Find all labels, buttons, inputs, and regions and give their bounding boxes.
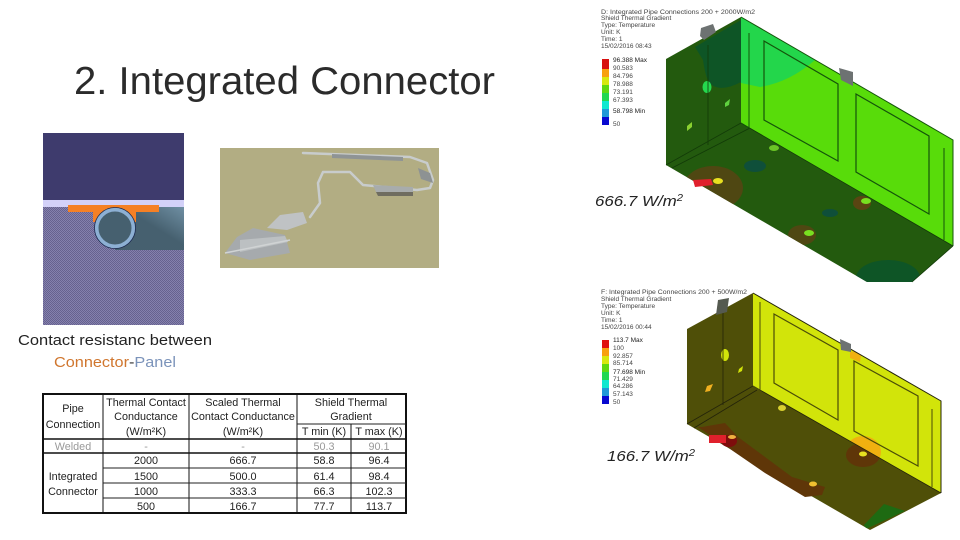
table: thermal results: 50.3	[313, 441, 335, 453]
legend: 166.7 simulation: 57.143	[613, 391, 633, 398]
table: thermal results: Shield Thermal	[315, 397, 387, 409]
table: thermal results: 333.3	[229, 486, 257, 498]
table: thermal results: Pipe	[62, 403, 84, 415]
table: thermal results: 1500	[134, 471, 158, 483]
legend: 166.7 simulation: 92.857	[613, 353, 633, 360]
legend: 166.7 simulation	[601, 289, 747, 406]
table: thermal results: -	[144, 441, 148, 453]
legend: 166.7 simulation: 50	[613, 399, 621, 406]
legend: 666.7 simulation	[601, 9, 755, 128]
legend: 666.7 simulation: 15/02/2016 08:43	[601, 43, 652, 50]
table: thermal results: 61.4	[313, 471, 335, 483]
table: thermal results: 113.7	[366, 501, 392, 513]
label: 166.7 W/m2: 2	[688, 448, 695, 459]
table: thermal results: 77.7	[313, 501, 335, 513]
legend: 166.7 simulation: F: Integrated Pipe Connections 200 + 500W/m2	[601, 289, 747, 296]
table: thermal results: 58.8	[313, 455, 335, 467]
legend: 166.7 simulation: 77.698 Min	[613, 369, 646, 376]
table: thermal results: 66.3	[313, 486, 335, 498]
table: thermal results: Contact Conductance	[191, 411, 295, 423]
table: thermal results: 96.4	[368, 455, 390, 467]
table: thermal results: T min (K)	[302, 426, 346, 438]
table: thermal results	[43, 394, 406, 513]
legend: 666.7 simulation: 96.388 Max	[613, 57, 648, 64]
table: thermal results: (W/m²K)	[126, 426, 166, 438]
table: thermal results: Gradient	[330, 411, 372, 423]
legend: 166.7 simulation: 85.714	[613, 360, 633, 367]
legend: 666.7 simulation: 58.798 Min	[613, 108, 646, 115]
legend: 166.7 simulation: Type: Temperature	[601, 303, 655, 310]
legend: 166.7 simulation: Time: 1	[601, 317, 623, 324]
legend: 166.7 simulation: 64.286	[613, 383, 633, 390]
table: thermal results: Conductance	[114, 411, 178, 423]
caption: contact resistance: Contact resistanc between	[18, 332, 212, 349]
label: 666.7 W/m2: 666.7 W/m	[595, 193, 668, 210]
legend: 166.7 simulation: Shield Thermal Gradient	[601, 296, 672, 303]
legend: 666.7 simulation: 84.796	[613, 73, 633, 80]
legend: 666.7 simulation: Time: 1	[601, 36, 623, 43]
legend: 666.7 simulation: Shield Thermal Gradient	[601, 15, 672, 22]
table: thermal results: (W/m²K)	[223, 426, 263, 438]
legend: 166.7 simulation: 100	[613, 345, 624, 352]
legend: 666.7 simulation: Type: Temperature	[601, 22, 655, 29]
table: thermal results: Welded	[55, 441, 91, 453]
table: thermal results: Connection	[46, 419, 100, 431]
table: thermal results: Scaled Thermal	[205, 397, 281, 409]
caption: connector-panel: Connector -Panel	[54, 354, 176, 371]
legend: 166.7 simulation: Unit: K	[601, 310, 621, 317]
legend: 166.7 simulation: 15/02/2016 00:44	[601, 324, 652, 331]
legend: 666.7 simulation: 78.988	[613, 81, 633, 88]
photo: integrated connector pipe	[220, 148, 439, 268]
table: thermal results: Integrated	[49, 471, 97, 483]
legend: 666.7 simulation: D: Integrated Pipe Connections 200 + 2000W/m2	[601, 9, 755, 16]
table: thermal results: 166.7	[229, 501, 257, 513]
table: thermal results: 98.4	[368, 471, 390, 483]
table: thermal results: 500.0	[229, 471, 257, 483]
legend: 666.7 simulation: Unit: K	[601, 29, 621, 36]
table: thermal results: 2000	[134, 455, 158, 467]
table: thermal results: 500	[137, 501, 155, 513]
table: thermal results: Connector	[48, 486, 98, 498]
legend: 666.7 simulation: 90.583	[613, 65, 633, 72]
table: thermal results: T max (K)	[355, 426, 403, 438]
legend: 166.7 simulation: 71.429	[613, 376, 633, 383]
title: 2. Integrated Connector	[74, 60, 495, 103]
simulation: 666.7 W/m2 shield	[666, 17, 953, 296]
table: thermal results: Thermal Contact	[106, 397, 186, 409]
simulation: 166.7 W/m2 shield	[687, 293, 941, 530]
label: 666.7 W/m2: 2	[676, 193, 683, 204]
table: thermal results: 90.1	[368, 441, 390, 453]
diagram: connector cross-section	[43, 133, 184, 325]
table: thermal results: 1000	[134, 486, 158, 498]
table: thermal results: -	[241, 441, 245, 453]
legend: 666.7 simulation: 67.393	[613, 97, 633, 104]
label: 166.7 W/m2: 166.7 W/m	[607, 448, 680, 465]
legend: 666.7 simulation: 50	[613, 121, 621, 128]
table: thermal results: 102.3	[365, 486, 393, 498]
legend: 666.7 simulation: 73.191	[613, 89, 633, 96]
table: thermal results: 666.7	[229, 455, 257, 467]
legend: 166.7 simulation: 113.7 Max	[613, 337, 644, 344]
